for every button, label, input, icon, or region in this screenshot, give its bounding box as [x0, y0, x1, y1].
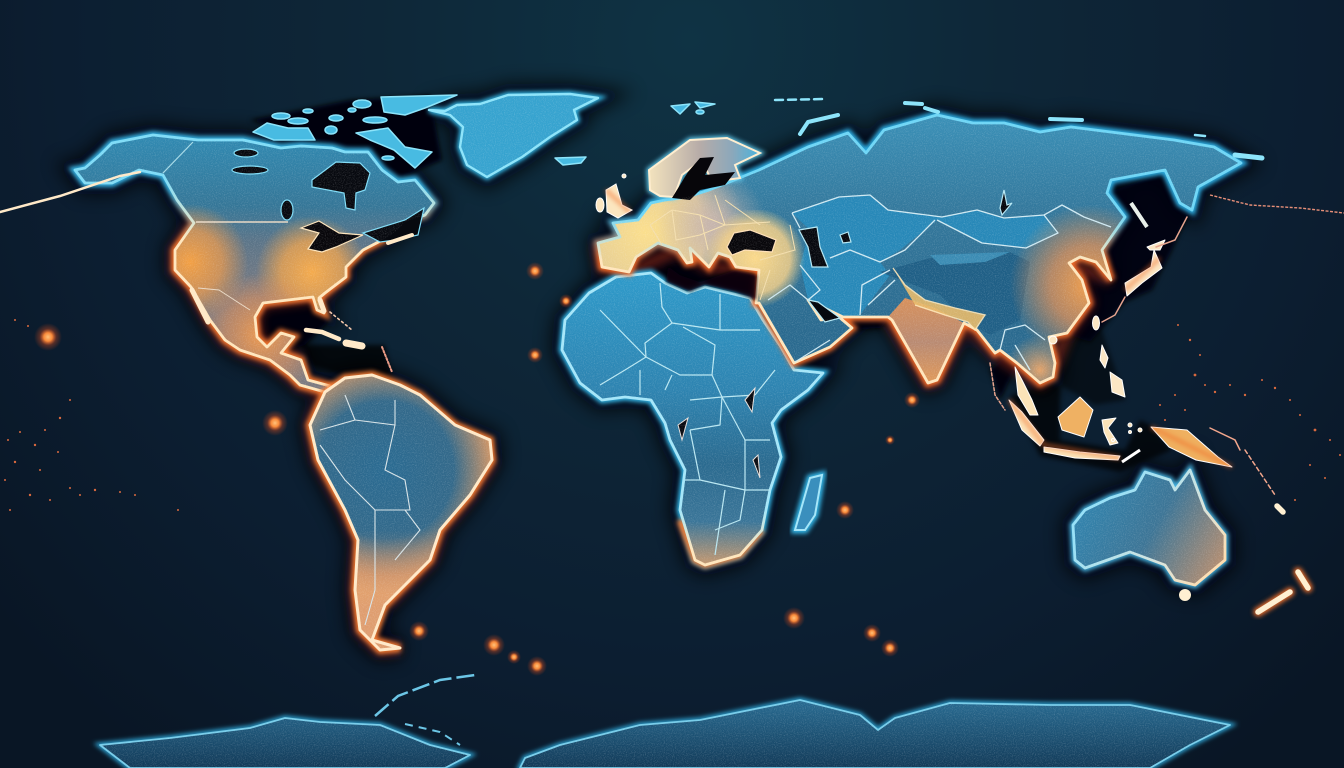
Hudson Bay and Great Lakes — [232, 149, 424, 242]
continent: Greenland — [429, 94, 598, 177]
Baltic and Mediterranean dark seas — [666, 157, 757, 300]
islands: Japan and East Asia — [1049, 203, 1165, 397]
Arabia borders — [768, 285, 830, 362]
continent: Eurasia — [530, 115, 1241, 395]
glowing ocean dots — [34, 262, 920, 676]
continent: North America — [75, 135, 434, 400]
near-black enclosed seas — [250, 95, 1190, 472]
trans-Pacific line — [1210, 195, 1344, 213]
continent: Australia — [1073, 470, 1225, 585]
island: Madagascar — [795, 475, 822, 530]
continent: South America — [310, 375, 492, 655]
Baja, Cuba, Caribbean and Aleutians — [0, 172, 412, 372]
region: Scandinavia — [649, 138, 760, 197]
borders — [792, 195, 1111, 370]
islands: Indonesia and New Guinea — [1009, 367, 1232, 467]
inland seas — [727, 230, 776, 255]
islands: Tasmania, New Zealand and New Caledonia — [1179, 506, 1308, 612]
country borders — [320, 395, 420, 625]
borders — [163, 142, 288, 310]
dark coastal shadows — [75, 94, 1241, 650]
islands: Canadian Arctic and Iceland — [253, 95, 586, 168]
continent: Africa — [562, 273, 823, 565]
red halo along warm coasts — [175, 223, 1111, 650]
country borders — [600, 283, 775, 555]
continent: Antarctica — [100, 675, 1230, 768]
speckled Pacific islands — [4, 319, 1341, 511]
islands: Britain and Ireland — [596, 174, 632, 218]
island arcs — [990, 217, 1187, 410]
land texture — [76, 94, 1238, 768]
African lakes — [678, 388, 760, 478]
regional heat overlays — [600, 182, 1123, 382]
Himalayan band — [893, 268, 985, 330]
glow under warm islands — [606, 190, 1232, 467]
islands: Arctic Russia — [671, 99, 1262, 158]
